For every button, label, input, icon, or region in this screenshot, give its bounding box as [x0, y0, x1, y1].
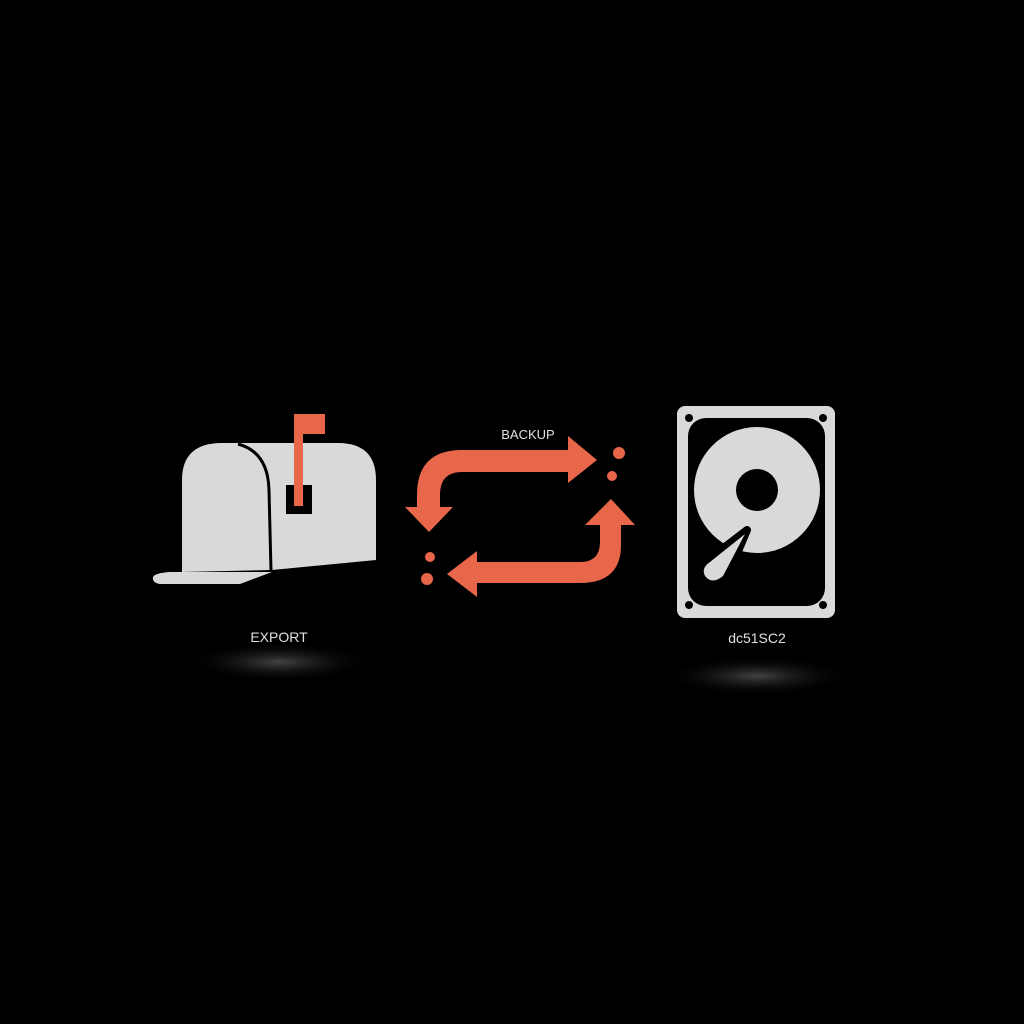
- label: EXPORT: EXPORT: [250, 629, 308, 645]
- label: BACKUP: BACKUP: [501, 427, 555, 442]
- icon: mailbox: [153, 414, 376, 584]
- glow: under drive: [662, 656, 852, 696]
- label: dc51SC2: dc51SC2: [728, 630, 786, 646]
- icon: hard drive: [677, 406, 835, 618]
- icon: sync arrows: [405, 436, 635, 597]
- glow: under mailbox: [184, 642, 374, 682]
